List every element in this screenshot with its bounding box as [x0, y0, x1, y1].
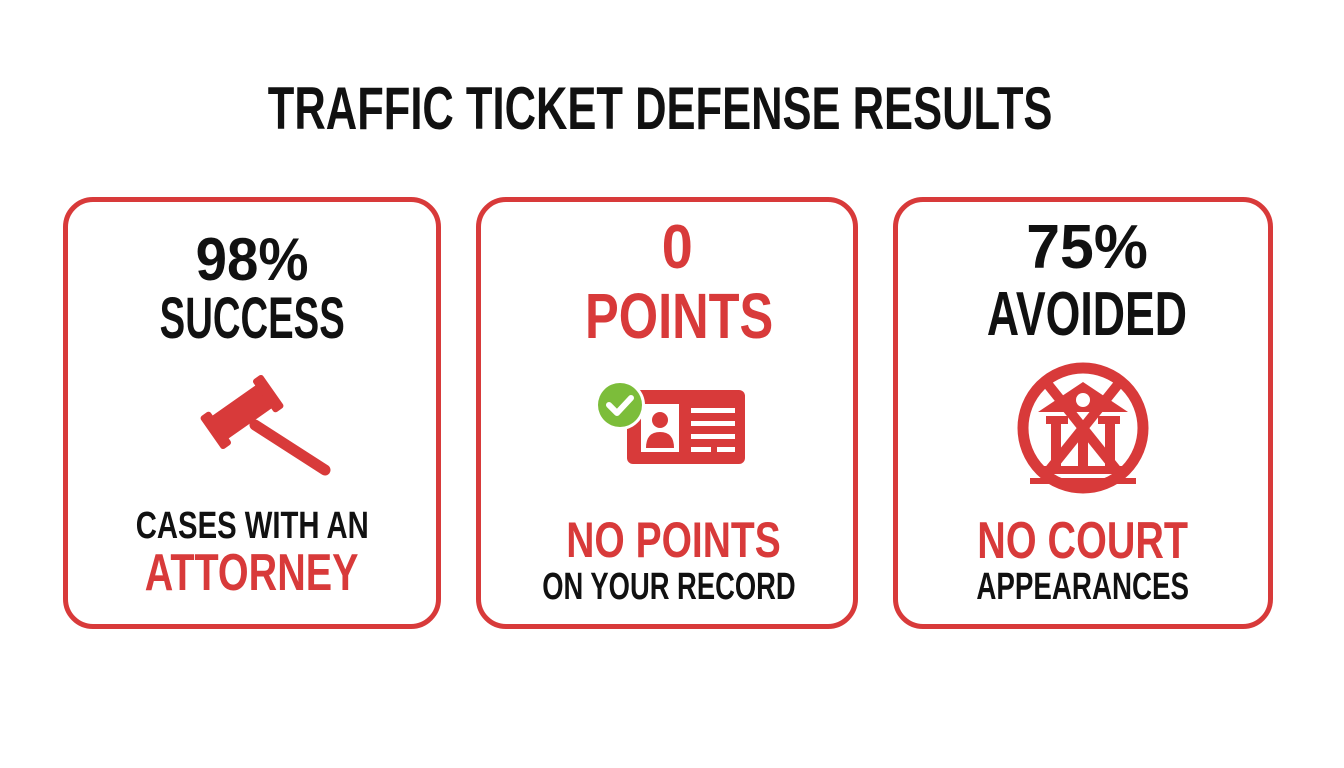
panel: points	[476, 197, 858, 629]
text: on your record: ON YOUR RECORD	[542, 566, 796, 608]
stat: 98%: 98%	[196, 226, 308, 293]
icon: id card with check	[598, 383, 745, 464]
icon: courthouse crossed out	[1018, 362, 1148, 494]
text: cases with an: CASES WITH AN	[136, 505, 368, 547]
label: avoided: AVOIDED	[987, 280, 1187, 349]
text: appearances: APPEARANCES	[977, 566, 1189, 608]
label: points: POINTS	[585, 280, 773, 352]
text: no points: NO POINTS	[567, 512, 781, 568]
text: attorney: ATTORNEY	[145, 544, 359, 602]
icon: gavel	[200, 375, 330, 476]
stat: 75%: 75%	[1026, 213, 1148, 282]
text: no court: NO COURT	[978, 512, 1188, 570]
label: success: SUCCESS	[159, 286, 345, 351]
panel: court	[893, 197, 1273, 629]
panel: success	[63, 197, 441, 629]
stat: 0: 0	[661, 213, 693, 282]
title: TRAFFIC TICKET DEFENSE RESULTS	[268, 75, 1052, 142]
